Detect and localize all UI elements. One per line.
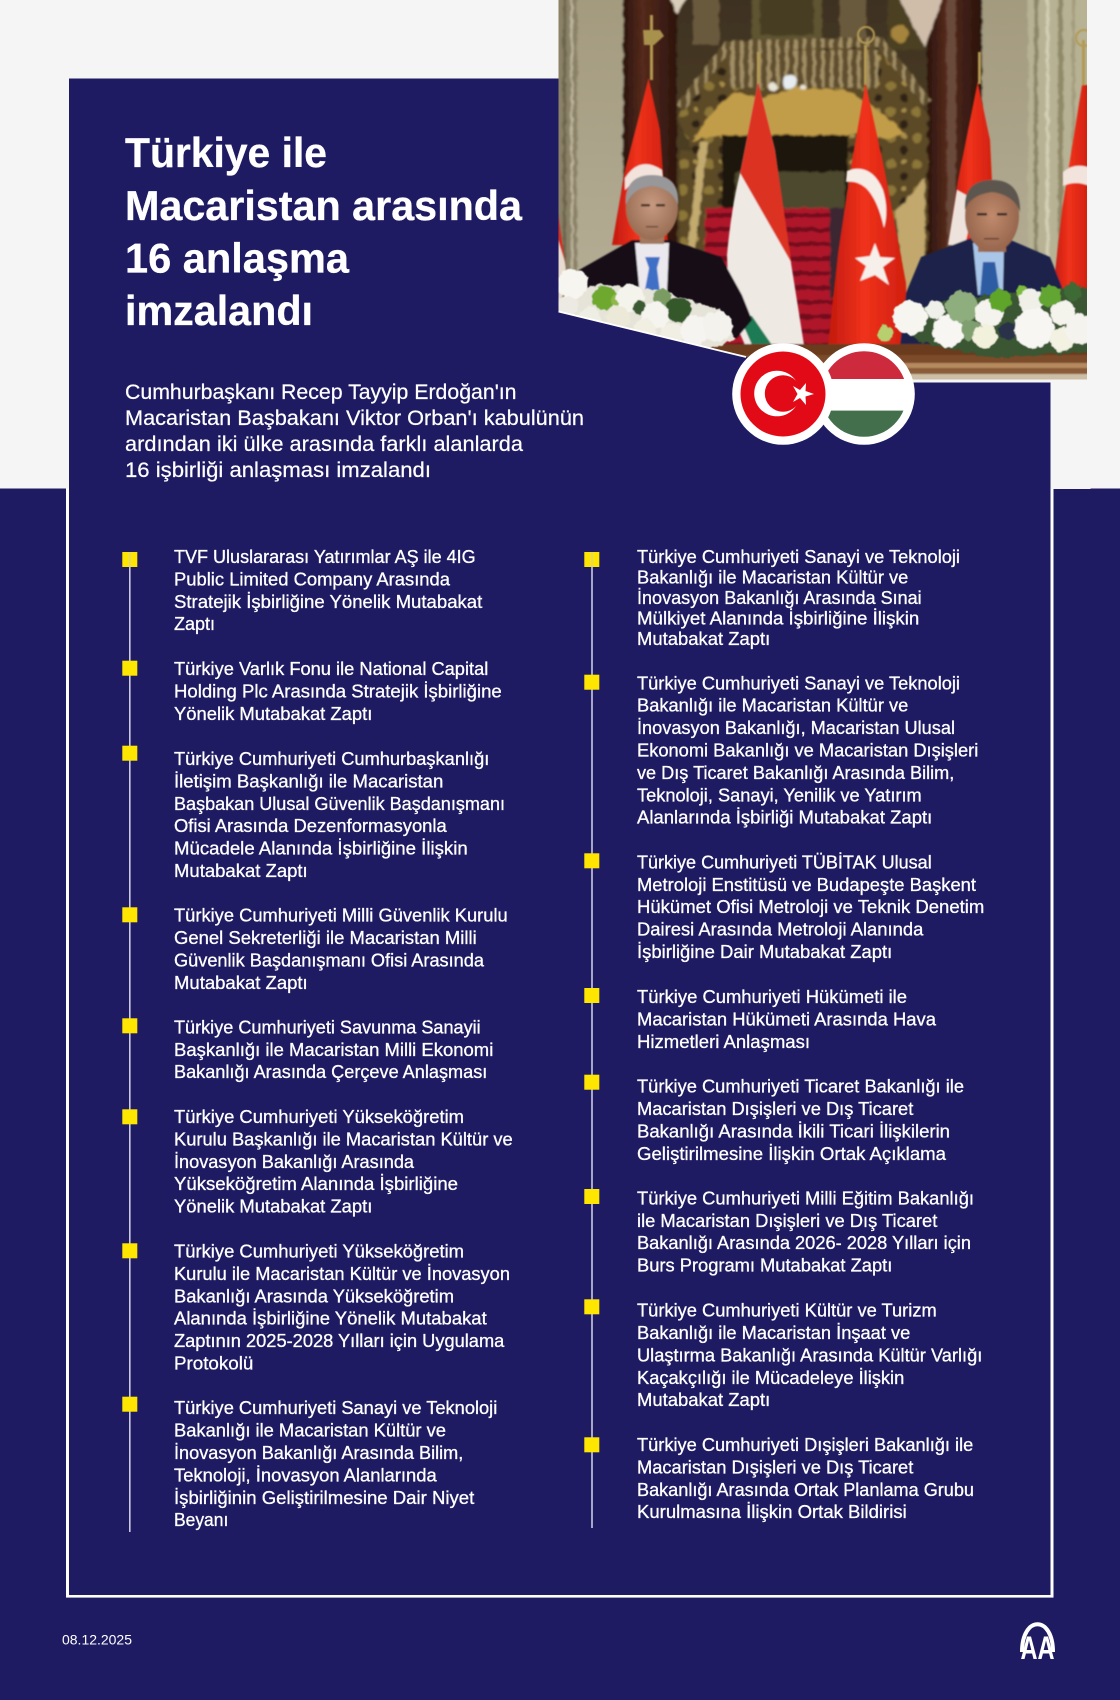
intro paragraph: 16 işbirliği anlaşması imzalandı: [125, 458, 431, 482]
left list item 1: TVF Uluslararası Yatırımlar AŞ ile 4IG: [174, 546, 476, 567]
left list item 5: Türkiye Cumhuriyeti Savunma Sanayii: [174, 1016, 481, 1037]
left list item 3: Mücadele Alanında İşbirliğine İlişkin: [174, 838, 468, 859]
right list item 8: [584, 1434, 974, 1522]
icon: Anadolu Agency logo: AA: [1020, 1630, 1054, 1666]
timeline line: left column: [129, 552, 131, 1532]
right list item 8: Bakanlığı Arasında Ortak Planlama Grubu: [637, 1479, 974, 1500]
left list item 1: Public Limited Company Arasında: [174, 568, 451, 589]
left list item 5: Bakanlığı Arasında Çerçeve Anlaşması: [174, 1061, 487, 1082]
left list item 6: Türkiye Cumhuriyeti Yükseköğretim: [174, 1106, 464, 1127]
right list item 3: Metroloji Enstitüsü ve Budapeşte Başkent: [637, 874, 977, 895]
left list item 7: Zaptının 2025-2028 Yılları için Uygulama: [174, 1330, 505, 1351]
right list item 2: [584, 672, 978, 828]
icon: Anadolu Agency logo: [1020, 1624, 1054, 1666]
left list item 7: [122, 1240, 510, 1374]
left list item 8: Teknoloji, İnovasyon Alanlarında: [174, 1464, 437, 1485]
photo flags and people: [558, 15, 1092, 380]
timeline line: right column: [591, 552, 593, 1528]
left list item 1: Zaptı: [174, 613, 215, 634]
left list item 3: Başbakan Ulusal Güvenlik Başdanışmanı: [174, 793, 505, 814]
right list item 1: Mutabakat Zaptı: [637, 628, 770, 649]
right list item 8: Macaristan Dışişleri ve Dış Ticaret: [637, 1456, 914, 1477]
intro paragraph: Cumhurbaşkanı Recep Tayyip Erdoğan'ın: [125, 380, 516, 404]
right list item 7: [584, 1299, 982, 1410]
left list item 1: Stratejik İşbirliğine Yönelik Mutabakat: [174, 591, 483, 612]
right list item 2: Ekonomi Bakanlığı ve Macaristan Dışişleri: [637, 740, 978, 760]
left list item 7: Türkiye Cumhuriyeti Yükseköğretim: [174, 1240, 464, 1262]
left list item 2: Yönelik Mutabakat Zaptı: [174, 703, 372, 724]
right list item 8: Türkiye Cumhuriyeti Dışişleri Bakanlığı ile: [637, 1434, 973, 1455]
left list item 3: Ofisi Arasında Dezenformasyonla: [174, 815, 447, 836]
photo flower arrangements: [555, 269, 1095, 358]
left list item 3: Mutabakat Zaptı: [174, 860, 308, 881]
right list item 1: Mülkiyet Alanında İşbirliğine İlişkin: [637, 608, 919, 628]
right list item 5: Türkiye Cumhuriyeti Ticaret Bakanlığı ile: [637, 1076, 964, 1097]
left list item 8: Beyanı: [174, 1509, 228, 1530]
right list item 6: Türkiye Cumhuriyeti Milli Eğitim Bakanlığı: [637, 1187, 974, 1208]
white strip below photo: [900, 380, 1087, 382]
right list item 7: Mutabakat Zaptı: [637, 1389, 770, 1410]
right list item 2: ve Dış Ticaret Bakanlığı Arasında Bilim,: [637, 762, 954, 783]
left list item 8: Bakanlığı ile Macaristan Kültür ve: [174, 1420, 446, 1441]
right list item 4: Türkiye Cumhuriyeti Hükümeti ile: [637, 986, 907, 1007]
right list item 5: Geliştirilmesine İlişkin Ortak Açıklama: [637, 1143, 947, 1164]
panel: main navy card with white frame: [66, 78, 1054, 1598]
right list item 4: [584, 986, 937, 1052]
right list item 1: Bakanlığı ile Macaristan Kültür ve: [637, 566, 908, 588]
title: imzalandı: [125, 287, 313, 334]
left list item 1: [122, 546, 483, 634]
left list item 8: [122, 1397, 497, 1530]
right list item 6: [584, 1187, 974, 1276]
right list item 3: Hükümet Ofisi Metroloji ve Teknik Denetim: [637, 896, 984, 917]
right list item 6: Burs Programı Mutabakat Zaptı: [637, 1255, 892, 1276]
right list item 1: [584, 546, 960, 649]
icon: Turkish flag circle: [732, 343, 834, 445]
intro paragraph: [125, 380, 584, 482]
right list item 3: İşbirliğine Dair Mutabakat Zaptı: [637, 941, 892, 962]
title: [125, 129, 523, 334]
right list item 5: [584, 1075, 964, 1164]
left list item 8: İnovasyon Bakanlığı Arasında Bilim,: [174, 1442, 463, 1463]
right list item 2: Teknoloji, Sanayi, Yenilik ve Yatırım: [637, 784, 922, 805]
background: lower navy band: [0, 488, 1120, 1700]
right list item 2: Türkiye Cumhuriyeti Sanayi ve Teknoloji: [637, 672, 960, 693]
right list item 7: Bakanlığı ile Macaristan İnşaat ve: [637, 1322, 910, 1343]
right list item 5: Bakanlığı Arasında İkili Ticari İlişkilerin: [637, 1120, 950, 1141]
white strip right of panel at photo: [1050, 382, 1090, 489]
left list item 2: Türkiye Varlık Fonu ile National Capital: [174, 658, 488, 679]
right list item 7: Kaçakçılığı ile Mücadeleye İlişkin: [637, 1367, 904, 1388]
right list item 7: Türkiye Cumhuriyeti Kültür ve Turizm: [637, 1300, 937, 1321]
left list item 4: Türkiye Cumhuriyeti Milli Güvenlik Kurulu: [174, 905, 508, 926]
left list item 3: Türkiye Cumhuriyeti Cumhurbaşkanlığı: [174, 748, 489, 769]
title: Macaristan arasında: [125, 182, 523, 229]
right list item 2: Bakanlığı ile Macaristan Kültür ve: [637, 695, 908, 716]
left list item 6: İnovasyon Bakanlığı Arasında: [174, 1151, 415, 1172]
photo: Orban and Erdogan at flag-lined press table: [550, 0, 1095, 385]
right list item 3: [584, 851, 984, 962]
right list item 6: ile Macaristan Dışişleri ve Dış Ticaret: [637, 1210, 938, 1231]
left list item 6: Yönelik Mutabakat Zaptı: [174, 1196, 372, 1217]
title: Türkiye ile: [125, 129, 327, 176]
left list item 6: [122, 1106, 513, 1217]
left list item 2: [122, 658, 502, 724]
date: 08.12.2025: [62, 1633, 132, 1648]
left list item 4: Güvenlik Başdanışmanı Ofisi Arasında: [174, 949, 485, 970]
background: upper light paper: [0, 0, 1120, 489]
left list item 3: [122, 746, 505, 881]
left list item 3: İletişim Başkanlığı ile Macaristan: [174, 770, 443, 791]
intro paragraph: Macaristan Başbakanı Viktor Orban'ı kabulünün: [125, 406, 584, 430]
left list item 6: Yükseköğretim Alanında İşbirliğine: [174, 1173, 458, 1194]
right list item 7: Ulaştırma Bakanlığı Arasında Kültür Varlığı: [637, 1344, 982, 1365]
right list item 4: Hizmetleri Anlaşması: [637, 1031, 810, 1052]
left list item 5: Başkanlığı ile Macaristan Milli Ekonomi: [174, 1039, 493, 1060]
left list item 5: [122, 1016, 493, 1082]
left list item 7: Kurulu ile Macaristan Kültür ve İnovasyon: [174, 1263, 510, 1284]
right list item 4: Macaristan Hükümeti Arasında Hava: [637, 1008, 937, 1029]
left list item 4: [122, 905, 508, 993]
title: 16 anlaşma: [125, 234, 350, 282]
left list item 7: Bakanlığı Arasında Yükseköğretim: [174, 1285, 454, 1306]
right list item 3: Türkiye Cumhuriyeti TÜBİTAK Ulusal: [637, 851, 932, 872]
photo diagonal white edge: [558, 312, 746, 357]
right list item 2: Alanlarında İşbirliği Mutabakat Zaptı: [637, 807, 932, 828]
left list item 6: Kurulu Başkanlığı ile Macaristan Kültür ve: [174, 1128, 513, 1149]
photo background: palace hall and staircase: [550, 0, 1095, 385]
right list item 5: Macaristan Dışişleri ve Dış Ticaret: [637, 1098, 914, 1119]
icon: Hungarian flag circle: [813, 343, 915, 445]
right list item 1: Türkiye Cumhuriyeti Sanayi ve Teknoloji: [637, 546, 960, 567]
left list item 2: Holding Plc Arasında Stratejik İşbirliğine: [174, 680, 502, 701]
intro paragraph: ardından iki ülke arasında farklı alanlarda: [125, 432, 523, 456]
right list item 2: İnovasyon Bakanlığı, Macaristan Ulusal: [637, 717, 955, 738]
left list item 7: Alanında İşbirliğine Yönelik Mutabakat: [174, 1308, 487, 1329]
left list item 4: Genel Sekreterliği ile Macaristan Milli: [174, 927, 477, 948]
left list item 8: İşbirliğinin Geliştirilmesine Dair Niyet: [174, 1487, 475, 1508]
right list item 6: Bakanlığı Arasında 2026- 2028 Yılları için: [637, 1232, 971, 1253]
right list item 8: Kurulmasına İlişkin Ortak Bildirisi: [637, 1501, 907, 1522]
right list item 1: İnovasyon Bakanlığı Arasında Sınai: [637, 587, 922, 608]
left list item 8: Türkiye Cumhuriyeti Sanayi ve Teknoloji: [174, 1397, 497, 1418]
left list item 4: Mutabakat Zaptı: [174, 972, 308, 993]
left list item 7: Protokolü: [174, 1352, 253, 1374]
right list item 3: Dairesi Arasında Metroloji Alanında: [637, 919, 924, 940]
